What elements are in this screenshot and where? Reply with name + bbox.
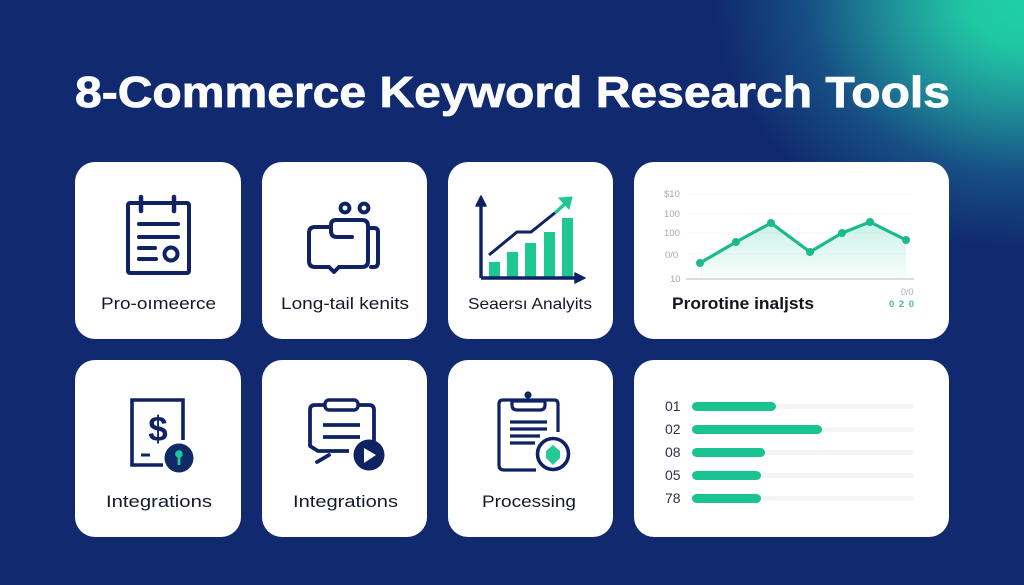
row 02: [665, 421, 914, 437]
panel: processing: [448, 360, 613, 537]
chart line: [696, 218, 910, 267]
icon: growth chart: [476, 196, 585, 283]
label: Pro-oımeerce: [101, 295, 216, 313]
panel: search analytics: [448, 162, 613, 339]
row 04: 05: [665, 467, 681, 483]
label: Integrations: [106, 492, 212, 511]
panel: integrations 1: [75, 360, 241, 537]
row 03: [665, 444, 914, 460]
panel: bar list: [634, 360, 949, 537]
row 01: [665, 398, 914, 414]
axis labels: 100: [664, 209, 680, 220]
row 05: [665, 490, 914, 506]
legend: [889, 287, 914, 310]
panel: pro-commerce: [75, 162, 241, 339]
axis labels: 100: [664, 228, 680, 239]
icon: clipboard with badge: [499, 391, 568, 470]
legend: 0/0: [901, 287, 914, 297]
panel: line chart: [634, 162, 949, 339]
axis labels: $10: [664, 189, 680, 200]
axis labels: 10: [670, 274, 681, 285]
axis labels: [664, 189, 681, 285]
icon: clipboard chat with play: [310, 400, 384, 470]
panel: long-tail: [262, 162, 427, 339]
row 01: 01: [665, 398, 681, 414]
icon: dollar document: [132, 400, 194, 472]
label: Prorotine inaljsts: [672, 294, 814, 313]
row 02: 02: [665, 421, 681, 437]
icon: notepad: [128, 197, 189, 273]
legend: 020: [889, 299, 914, 310]
chart area: [700, 222, 906, 278]
title: 8-Commerce Keyword Research Tools: [75, 68, 950, 117]
label: Seaersı Analyits: [468, 296, 592, 313]
label: Integrations: [293, 492, 398, 511]
icon: dollar document: $: [148, 410, 168, 449]
axis labels: 0/0: [665, 250, 678, 261]
row 05: 78: [665, 490, 681, 506]
icon: chat bubbles: [309, 204, 378, 272]
panel: integrations 2: [262, 360, 427, 537]
row 03: 08: [665, 444, 681, 460]
label: Processing: [482, 492, 576, 511]
label: Long-tail kenits: [281, 295, 409, 313]
row 04: [665, 467, 914, 483]
